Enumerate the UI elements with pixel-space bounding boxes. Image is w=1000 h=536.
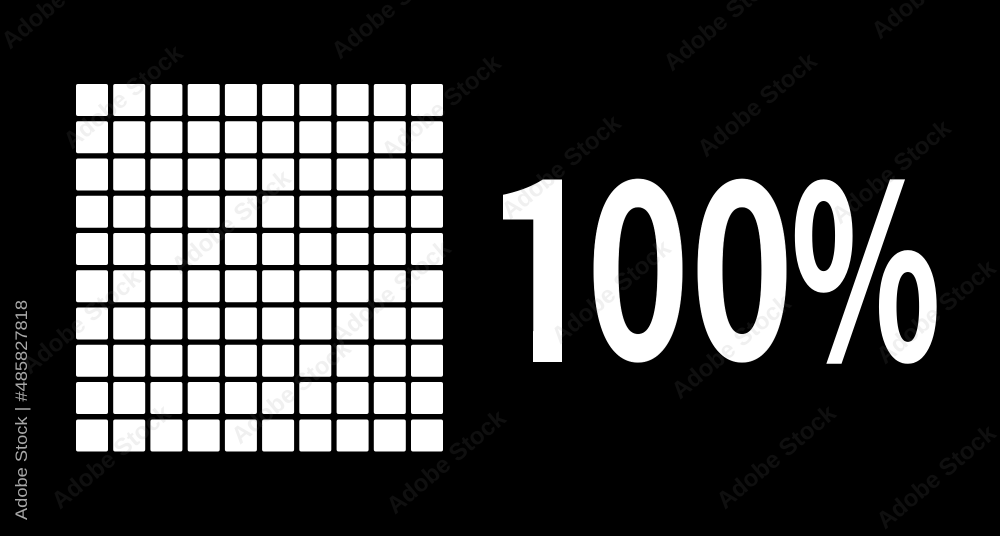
watermark: repeated diagonal Adobe Stock text: Adobe Stock <box>17 264 147 380</box>
percentage value: 100% <box>503 178 937 364</box>
watermark: repeated diagonal Adobe Stock text: Adobe Stock <box>872 254 1000 370</box>
percentage value: 100%: 1 <box>474 70 619 435</box>
watermark: repeated diagonal Adobe Stock text: Adobe Stock <box>497 109 627 225</box>
watermark: repeated diagonal Adobe Stock text: Adobe Stock <box>667 289 797 405</box>
watermark: repeated diagonal Adobe Stock text: Adobe Stock <box>827 114 957 230</box>
watermark: repeated diagonal Adobe Stock text: Adobe Stock <box>377 49 507 165</box>
watermark: repeated diagonal Adobe Stock text: Adobe Stock <box>382 404 512 520</box>
watermark: repeated diagonal Adobe Stock text: Adobe Stock <box>59 39 189 155</box>
watermark: repeated diagonal Adobe Stock text: Adobe Stock <box>47 399 177 515</box>
watermark: repeated diagonal Adobe Stock text: Adobe Stock <box>712 399 842 515</box>
percentage value: 100%: % <box>790 84 941 428</box>
waffle chart: 10 by 10 grid of filled squares <box>76 84 443 452</box>
watermark: repeated diagonal Adobe Stock text: Adobe Stock <box>547 234 677 350</box>
watermark: repeated diagonal Adobe Stock text: Adobe Stock <box>167 164 297 280</box>
stock image id, vertical text: Adobe Stock | #485827818 <box>12 300 31 520</box>
watermark: repeated diagonal Adobe Stock text: Adobe Stock <box>693 47 823 163</box>
watermark: repeated diagonal Adobe Stock text: Adobe Stock <box>227 334 357 450</box>
percentage value: 100%: 0 <box>586 76 690 430</box>
percentage value: 100%: 0 <box>690 76 794 430</box>
watermark: repeated diagonal Adobe Stock text: Adobe Stock <box>327 234 457 350</box>
watermark: repeated diagonal Adobe Stock text: Adobe Stock <box>872 419 1000 535</box>
